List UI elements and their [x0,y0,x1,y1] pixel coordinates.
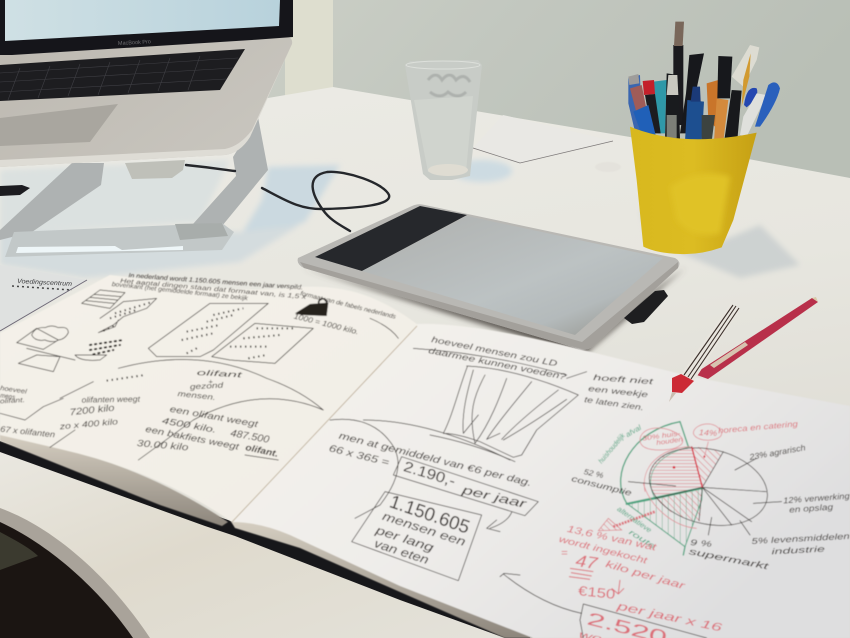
red sector: horeca [692,447,723,487]
laptop stand right leg [193,117,268,226]
pie labels: red: horeca en catering [718,419,799,435]
pie labels: black: 12% verwerking [783,491,850,505]
pie labels: black: consumptie [571,473,633,498]
box: per jaar: 2.190,- [401,459,457,490]
pens [628,22,780,142]
weights notes: mens [0,392,16,401]
note: hoeveel mensen: hoeveel mensen zou LD [431,334,558,368]
olifant notes: gezond [190,381,224,391]
red calculation notes: = [561,548,568,560]
weights notes: olifant. [0,397,25,405]
pencil [694,297,818,379]
heading notes: formaat van de fabels nederlands [300,290,397,321]
weights notes: 4500 kilo. [161,415,217,435]
tablet pen loop [624,290,668,324]
cup body [630,127,757,254]
graphics tablet [298,204,685,356]
desk cut-out [0,508,150,638]
pie labels: black: 5% levensmiddelen [751,531,850,546]
pie labels: green: route [627,527,657,551]
pie chart sketch and notes [500,419,850,638]
box: mensen per jaar: van eten [372,536,431,567]
screen bezel [0,0,293,55]
model label: MacBook Pro [118,39,151,47]
red rings [640,424,722,528]
sketch: second container [212,323,313,363]
pie labels: green: afval [624,423,643,439]
right page sketches [328,348,587,581]
heading notes: In nederland wordt 1.150.605 mensen een jaar verspild. [128,272,303,292]
pie labels: black: en opslag [789,502,834,515]
note: men at gemiddeld: men at gemiddeld van €6 per dag. [338,431,533,489]
weight label: 1000 = 1000 kilo. [293,312,360,336]
keyboard [0,49,245,101]
red calculation notes: 47 [574,551,599,573]
wall [0,0,850,190]
note: hoeft niet [584,373,655,412]
note: calculation: 66 x 365 = [328,443,390,469]
box: mensen per jaar [352,491,482,581]
acrylic stand base [5,223,234,257]
olifant notes: mensen. [177,389,216,402]
weights notes [0,385,279,460]
note: hoeft niet: te laten zien. [584,395,644,412]
pie labels: green: alternatieve [616,504,653,535]
right page [232,324,850,638]
olifant notes [177,368,244,402]
tablet buttons panel [315,206,467,271]
pie labels: black: industrie [771,544,826,556]
page arcs [0,318,398,460]
note: hoeveel mensen [428,334,567,382]
left page block [0,434,228,526]
laptop base [0,37,292,167]
box: mensen per jaar: per lang [373,522,436,555]
red sector: huishoudens [649,447,702,498]
weights notes: olifant. [245,442,279,459]
total box outline [580,604,707,638]
box: mensen per jaar: 1.150.605 [387,491,473,538]
red calculation notes: €150 [577,583,616,602]
icon: weight [295,299,328,316]
scrap of tape [595,162,621,172]
open sketchbook [0,272,850,638]
olifant notes: olifant [197,368,244,379]
tablet front edge [300,262,678,350]
olifant notes: + [208,377,213,386]
left page sketches and notes [0,272,398,460]
weights notes: 30.00 kilo [136,438,189,452]
arcs [330,419,510,518]
red calculation notes [558,524,724,638]
pie labels: black [571,442,850,572]
loose paper left [0,265,87,331]
weights notes: een olifant weegt [169,404,259,429]
pie outline [628,437,782,537]
laptop stand left leg [0,163,104,240]
heading notes: bovenkant (het gemiddelde formaat) ze bekijk [111,281,249,302]
pie labels: green: huishoudelijk [596,431,627,465]
sketch: curtain funnel [413,348,587,462]
lower desk [0,445,510,638]
right page block [230,520,560,638]
drinking glass [405,60,512,182]
cable [186,165,389,231]
left page [0,275,418,522]
weights notes: zo x 400 kilo [58,416,119,431]
pen cup [628,22,780,254]
pie labels: red [642,419,799,447]
weights notes: 487.500 [229,428,271,446]
pie labels: red: 14% [699,428,717,438]
box: mensen per jaar: mensen een [381,509,468,549]
heading notes [111,272,397,321]
loose paper left: Voedingscentrum [17,278,73,288]
heading notes: Het aantal dingen staan dat formaat van, is 1,5 x [120,278,308,301]
tablet body [298,204,679,350]
note: hoeveel mensen: daarmee kunnen voeden? [428,345,567,382]
pie labels: black: 52 % [583,467,605,480]
laptop on stand [0,0,293,257]
pie labels: green [596,423,657,551]
red arrow with wedge [598,512,655,531]
curved arrow to total box [500,573,582,613]
weights notes: een bakfiets weegt [145,424,240,452]
arrow [487,512,512,532]
pie labels: red: houden [656,436,684,447]
screen [5,0,280,41]
striped pen [669,304,740,402]
sketch: large container with tally marks [148,303,268,357]
cup highlight [670,173,730,235]
book cover edge [0,441,530,638]
red sector: lower [655,487,702,522]
sketch: funnel with tally marks [98,298,157,333]
acrylic foot [125,160,185,179]
green band [621,422,702,555]
pie labels: black: 23% agrarisch [748,442,807,462]
trackpad [0,104,118,146]
red calculation notes: per jaar x 16 [614,600,724,635]
pie labels: black: supermarkt [688,546,770,572]
note: hoeft niet: hoeft niet [593,373,655,386]
weights notes: olifanten weegt [82,395,141,405]
weights notes: 7200 kilo [69,403,115,417]
weights notes: hoeveel [0,385,28,396]
sketch: crate [82,290,125,308]
red calculation notes: 2.520 [585,608,669,638]
weights notes: 67 x olifanten [0,424,56,439]
blue shadows on desk [0,160,800,278]
sketch: tally [107,375,145,381]
box: per jaar: per jaar [459,482,529,511]
red calculation notes: 13,6 % van wat [566,524,659,554]
red calculation notes: kilo per jaar [604,559,687,592]
red calculation notes: wordt ingekocht [558,534,649,566]
pie labels: red: 30% huis- [642,430,682,443]
sketch: balance with fruit [17,326,123,372]
box: per jaar [393,457,538,516]
tablet active area [362,216,663,335]
note: hoeft niet: een weekje [588,384,649,399]
pie labels: black: 9 % [690,537,713,549]
paper on desk [473,115,613,163]
stylus tip on desk [0,185,30,196]
